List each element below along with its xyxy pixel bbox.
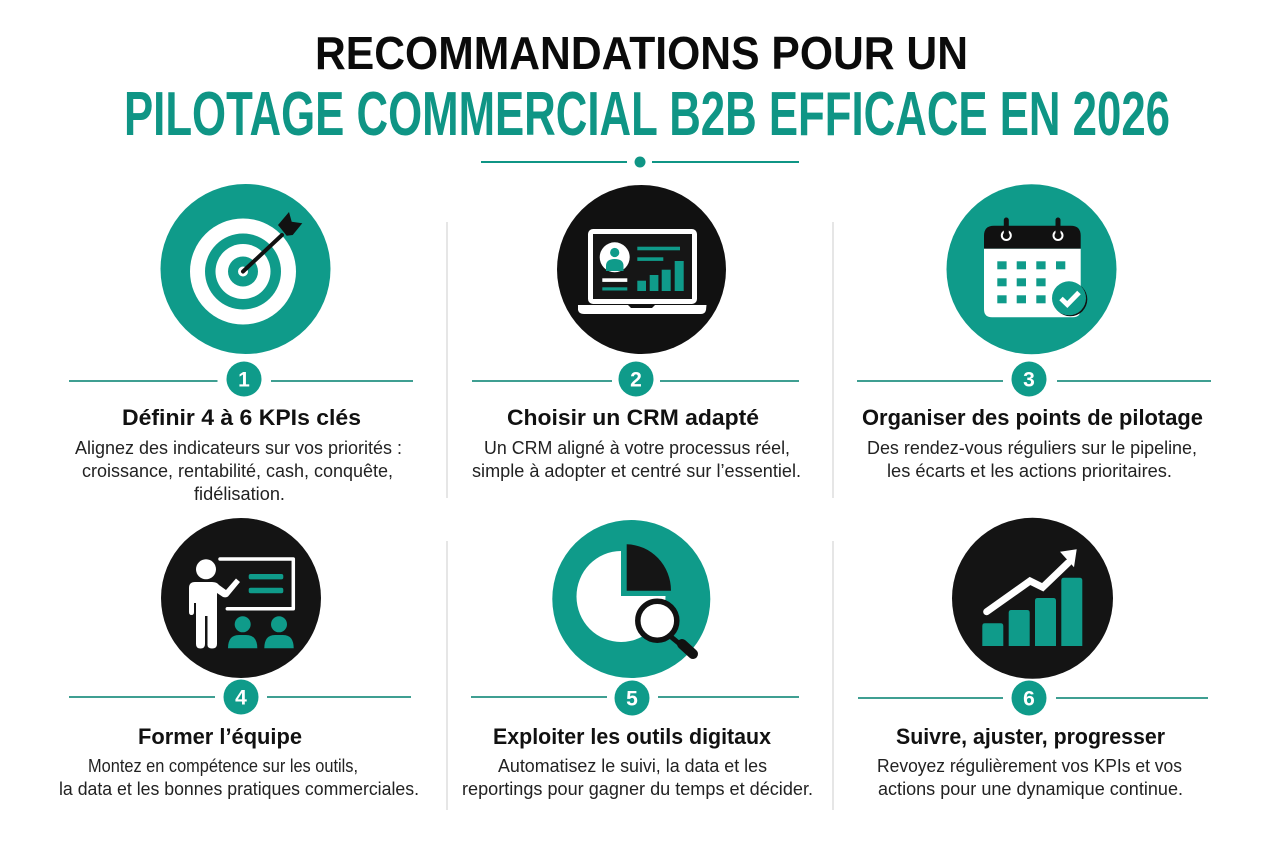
- text block: [59, 756, 419, 799]
- text block: actions pour une dynamique continue.: [878, 779, 1183, 799]
- text block: Automatisez le suivi, la data et les: [498, 756, 767, 776]
- heading: Suivre, ajuster, progresser: [896, 724, 1165, 749]
- panel: step 4: [59, 518, 419, 799]
- text block: [75, 438, 402, 504]
- heading: Organiser des points de pilotage: [862, 405, 1203, 430]
- text block: Des rendez-vous réguliers sur le pipeline,: [867, 438, 1197, 458]
- step number 1: [69, 362, 413, 396]
- title: [124, 27, 1170, 149]
- text block: Alignez des indicateurs sur vos priorités :: [75, 438, 402, 458]
- panel: step 1: [69, 184, 413, 504]
- step number 2: [472, 362, 799, 396]
- step number 3: 3: [1023, 368, 1035, 392]
- text block: [472, 438, 801, 481]
- icon: pie chart and magnifier: [552, 520, 710, 678]
- step number 5: 5: [626, 688, 638, 710]
- heading: Définir 4 à 6 KPIs clés: [122, 405, 361, 430]
- text block: croissance, rentabilité, cash, conquête,: [82, 461, 393, 481]
- step number 6: 6: [1023, 688, 1035, 710]
- text block: les écarts et les actions prioritaires.: [887, 461, 1172, 481]
- step number 6: [858, 680, 1208, 716]
- title: RECOMMANDATIONS POUR UN: [315, 27, 968, 79]
- step number 3: [857, 362, 1211, 396]
- text block: Montez en compétence sur les outils,: [88, 756, 358, 776]
- panel: step 6: [858, 518, 1208, 799]
- text block: reportings pour gagner du temps et décider.: [462, 779, 813, 799]
- panel: step 5: [462, 520, 813, 799]
- text block: fidélisation.: [194, 484, 285, 504]
- heading: Exploiter les outils digitaux: [493, 724, 772, 749]
- text block: Un CRM aligné à votre processus réel,: [484, 438, 790, 458]
- icon: laptop: [557, 185, 726, 354]
- step number 5: [471, 680, 799, 716]
- step number 4: 4: [235, 686, 247, 710]
- step number 2: 2: [630, 368, 642, 392]
- step number 1: 1: [238, 368, 250, 392]
- text block: la data et les bonnes pratiques commerciales.: [59, 779, 419, 799]
- icon: growth chart: [952, 518, 1113, 679]
- text block: Revoyez régulièrement vos KPIs et vos: [877, 756, 1182, 776]
- text block: simple à adopter et centré sur l’essentiel.: [472, 461, 801, 481]
- text block: [867, 438, 1197, 481]
- icon: calendar: [946, 184, 1116, 354]
- panel: step 2: [472, 185, 801, 481]
- step number 4: [69, 680, 411, 714]
- icon: target: [160, 184, 330, 354]
- heading: Choisir un CRM adapté: [507, 405, 759, 430]
- heading: Former l’équipe: [138, 724, 302, 749]
- panel: step 3: [857, 184, 1211, 481]
- text block: [877, 756, 1183, 799]
- icon: trainer at board: [161, 518, 321, 678]
- text block: [462, 756, 813, 799]
